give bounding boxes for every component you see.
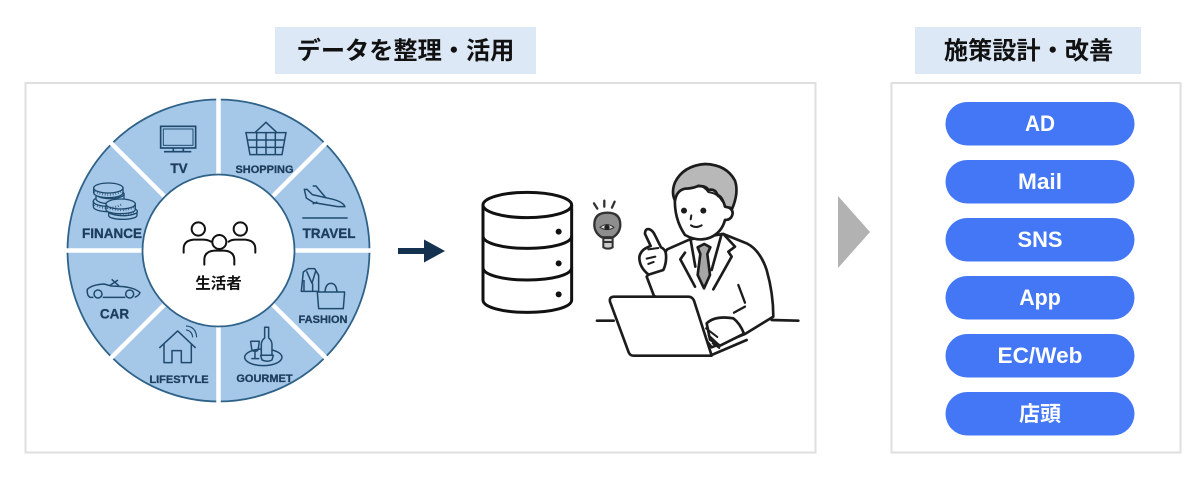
segment: GOURMET — [236, 327, 293, 385]
segment: FINANCE: FINANCE — [82, 226, 142, 241]
pill: App — [946, 276, 1134, 320]
necktie — [698, 244, 710, 288]
icon: consumers — [184, 222, 255, 265]
arrow: wheel to database — [398, 240, 445, 262]
pill: AD: AD — [1025, 111, 1055, 136]
panel: measures — [892, 83, 1180, 452]
heading: data organisation: データを整理・活用 — [297, 37, 514, 65]
segment: TV — [161, 126, 196, 176]
icon: airplane — [302, 186, 348, 218]
segment: FASHION — [299, 269, 347, 326]
pill: in-store: 店頭 — [1019, 403, 1061, 426]
heading: data organisation — [275, 27, 536, 74]
segment: GOURMET: GOURMET — [236, 373, 293, 385]
segment: FINANCE — [82, 183, 142, 241]
pill: App: App — [1019, 285, 1061, 310]
pill: Mail: Mail — [1018, 169, 1062, 194]
segment: CAR: CAR — [100, 306, 129, 322]
heading: measures design: 施策設計・改善 — [944, 38, 1113, 65]
icon: television — [161, 126, 196, 152]
icon: jacket and bag — [301, 269, 345, 309]
pill: EC/Web — [946, 334, 1134, 378]
icon: basket — [246, 122, 286, 155]
pill: in-store — [946, 392, 1134, 436]
heading: measures design — [915, 27, 1141, 74]
segment: SHOPPING — [235, 122, 294, 176]
hair — [673, 164, 736, 208]
icon: coins — [93, 183, 137, 219]
panel: data utilisation — [26, 83, 816, 452]
eyes, nose and mouth — [681, 208, 687, 214]
segment: LIFESTYLE — [149, 326, 209, 386]
arrow: to measures — [838, 196, 870, 268]
icon: convertible — [87, 279, 140, 298]
segment: SHOPPING: SHOPPING — [235, 164, 294, 176]
face — [675, 183, 733, 239]
segment: LIFESTYLE: LIFESTYLE — [149, 374, 209, 386]
pill: Mail — [946, 160, 1134, 204]
wheel ring — [68, 100, 370, 402]
illustration: businessman at laptop — [597, 164, 798, 356]
pill: EC/Web: EC/Web — [998, 343, 1082, 368]
wheel spokes — [65, 97, 372, 404]
shirt and collar — [691, 234, 722, 270]
pill: AD — [946, 102, 1134, 146]
typing hand and cuff — [707, 317, 744, 346]
desk line — [597, 316, 798, 325]
segment: CAR — [87, 279, 140, 322]
segment: FASHION: FASHION — [299, 314, 347, 326]
body and jacket — [647, 234, 773, 347]
icon: database — [483, 192, 572, 312]
icon: smart home — [159, 326, 197, 363]
lapels — [680, 234, 735, 289]
segment: TRAVEL — [302, 186, 356, 241]
segment: TRAVEL: TRAVEL — [302, 226, 356, 241]
wheel centre — [142, 174, 294, 326]
icon: idea light bulb — [594, 201, 620, 249]
laptop — [610, 297, 712, 356]
icon: wine and plate — [245, 327, 282, 366]
pill: SNS — [946, 218, 1134, 262]
consumer category wheel — [65, 97, 372, 404]
pill: SNS: SNS — [1018, 227, 1062, 252]
label: consumers: 生活者 — [195, 274, 242, 292]
segment: TV: TV — [170, 161, 188, 176]
pointing hand — [639, 229, 666, 275]
